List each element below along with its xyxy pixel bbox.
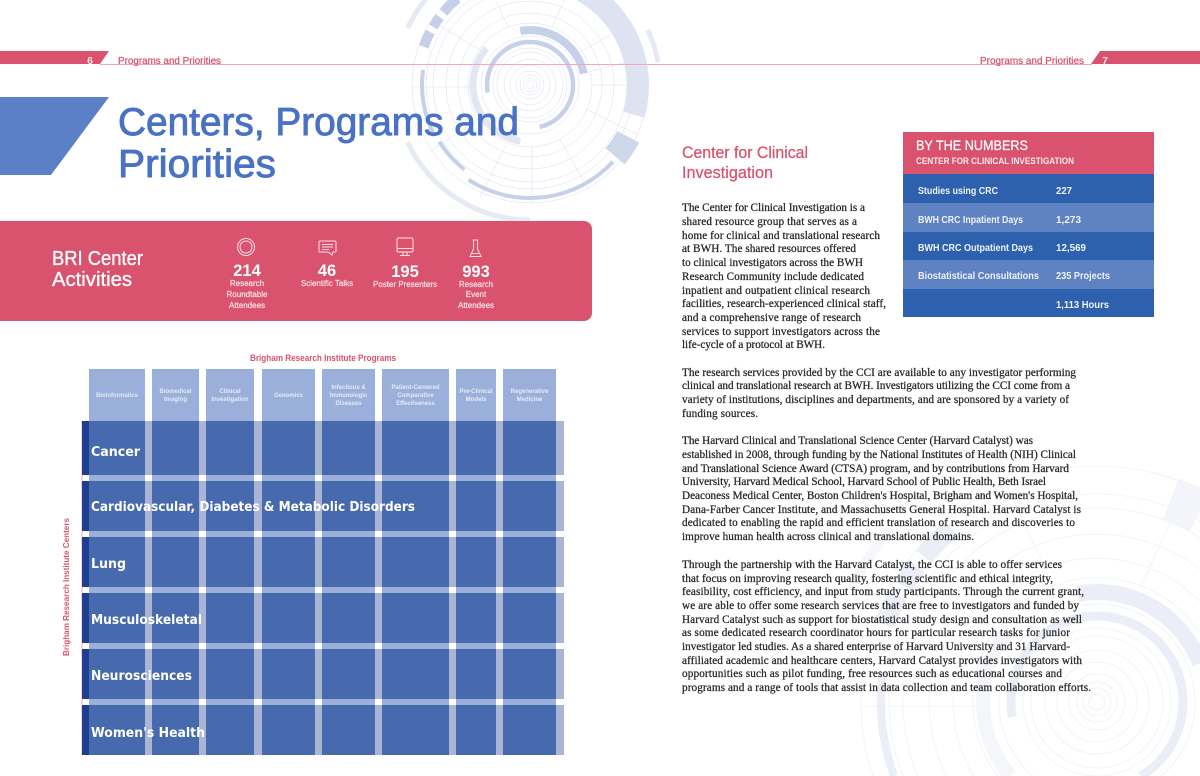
text block: third paragraph: dedicated to enabling the rapid and efficient translation of research and discoveries to	[682, 517, 1075, 529]
program column labels: Pre-Clinical	[459, 389, 493, 395]
program column labels: Diseases	[335, 401, 362, 407]
panel: by the numbers	[903, 132, 1154, 317]
panel heading	[52, 248, 143, 291]
text block: intro paragraph	[682, 202, 886, 351]
table row: outpatient: 12,569	[1056, 243, 1086, 254]
program column labels: Clinical	[219, 389, 241, 395]
text block: intro paragraph: life-cycle of a protocol at BWH.	[682, 339, 825, 351]
decorative dial: top	[406, 0, 660, 221]
stat: poster presenters: Poster Presenters	[373, 280, 437, 289]
stat: event attendees: Attendees	[458, 301, 494, 310]
row: Cancer	[82, 421, 564, 475]
row: Neurosciences	[82, 649, 564, 699]
program column labels: Medicine	[517, 397, 543, 403]
text block: second paragraph: The research services provided by the CCI are available to any investigator performing	[682, 367, 1076, 379]
decorative dial: bottom right	[852, 466, 1200, 776]
table row: studies: 227	[1056, 186, 1072, 197]
chart axis label: centers: Brigham Research Institute Centers	[61, 518, 71, 656]
stat: poster presenters: 195	[391, 263, 419, 281]
text block: second paragraph: funding sources.	[682, 408, 758, 420]
title: Centers, Programs and	[118, 101, 519, 144]
row: Musculoskeletal: Musculoskeletal	[91, 612, 202, 628]
stat: roundtable attendees: Research	[230, 279, 264, 288]
text block: third paragraph: established in 2008, through funding by the National Institutes of Health (NIH) Clinical	[682, 449, 1076, 461]
table row: inpatient: BWH CRC Inpatient Days	[918, 215, 1023, 226]
program column labels: Infectious &	[331, 385, 366, 391]
left running head: Programs and Priorities	[118, 55, 221, 67]
right running head: Programs and Priorities	[980, 55, 1084, 67]
program columns	[89, 369, 556, 755]
text block: fourth paragraph: that focus on improving research quality, fostering scientific and ethical integrity,	[682, 573, 1053, 585]
stat: scientific talks	[301, 241, 353, 288]
text block: third paragraph: and Translational Science Award (CTSA) program, and by contributions from Harvard	[682, 463, 1069, 475]
program column labels: Immunologic	[330, 393, 368, 399]
stat: poster presenters	[373, 238, 437, 289]
stat: roundtable attendees: 214	[233, 262, 262, 280]
chart heading: programs: Brigham Research Institute Programs	[250, 353, 396, 363]
stat: event attendees: Research	[459, 280, 493, 289]
text block: third paragraph: Dana-Farber Cancer Institute, and Massachusetts General Hospital. Harvard Catalyst is	[682, 504, 1081, 516]
panel heading: Activities	[52, 269, 132, 291]
text block: fourth paragraph: opportunities such as pilot funding, free resources such as educational courses and	[682, 668, 1062, 680]
table row: consultations: Biostatistical Consultations	[918, 271, 1039, 282]
row: Women's Health	[82, 705, 564, 755]
program column labels: Biomedical	[159, 389, 192, 395]
text block: intro paragraph: The Center for Clinical Investigation is a	[682, 202, 865, 214]
section heading: Investigation	[682, 163, 773, 182]
text block: fourth paragraph: as some dedicated research coordinator hours for particular research tasks for junior	[682, 627, 1070, 639]
left page tab: 6	[87, 55, 93, 67]
header rule	[100, 64, 1092, 65]
text block: intro paragraph: at BWH. The shared resources offered	[682, 243, 856, 255]
text block: fourth paragraph: affiliated academic and healthcare centers, Harvard Catalyst provides investigators with	[682, 655, 1082, 667]
table header: CENTER FOR CLINICAL INVESTIGATION	[916, 156, 1074, 167]
table row: inpatient	[903, 203, 1154, 232]
row: Lung: Lung	[91, 556, 126, 572]
right page tab	[1091, 51, 1200, 67]
text block: second paragraph: clinical and translational research at BWH. Investigators utilizing the CCI come from a	[682, 380, 1070, 392]
text block: third paragraph: Deaconess Medical Center, Boston Children's Hospital, Brigham and Women's Hospital,	[682, 490, 1078, 502]
table row: consultations: 235 Projects	[1056, 271, 1110, 282]
text block: third paragraph: University, Harvard Medical School, Harvard School of Public Health, Beth Israel	[682, 476, 1046, 488]
text block: intro paragraph: services to support investigators across the	[682, 326, 880, 338]
table row: hours	[903, 289, 1154, 317]
section heading	[682, 143, 808, 182]
panel: BRI center activities	[0, 221, 592, 321]
program column labels: Patient-Centered	[391, 385, 440, 391]
stat: roundtable attendees: Roundtable	[227, 290, 268, 299]
right page tab: 7	[1102, 55, 1108, 67]
program column labels: Comparative	[397, 393, 434, 399]
table header	[903, 132, 1154, 174]
row: Cardiovascular	[82, 481, 564, 531]
text block: fourth paragraph: we are able to offer some research services that are free to investigators and funded by	[682, 600, 1079, 612]
text block: third paragraph: improve human health across clinical and translational domains.	[682, 531, 974, 543]
text block: third paragraph: The Harvard Clinical and Translational Science Center (Harvard Catalyst) was	[682, 435, 1033, 447]
text block: intro paragraph: shared resource group that serves as a	[682, 216, 857, 228]
left page tab	[0, 51, 109, 67]
program column labels: Investigation	[211, 397, 249, 403]
row: Musculoskeletal	[82, 593, 564, 643]
panel heading: BRI Center	[52, 248, 143, 270]
table row: consultations	[903, 260, 1154, 289]
text block: third paragraph	[682, 435, 1081, 543]
row: Cardiovascular: Cardiovascular, Diabetes & Metabolic Disorders	[91, 499, 415, 515]
program column labels: Models	[466, 397, 487, 403]
text block: fourth paragraph	[682, 559, 1091, 694]
text block: intro paragraph: Research Community include dedicated	[682, 271, 864, 283]
table header: BY THE NUMBERS	[916, 137, 1028, 153]
text block: fourth paragraph: programs and a range of tools that assist in data collection and team collaboration efforts.	[682, 682, 1091, 694]
program column labels: Imaging	[164, 397, 187, 403]
program column labels: Bioinformatics	[96, 393, 139, 399]
row: Women's Health: Women's Health	[91, 725, 205, 741]
section heading: Center for Clinical	[682, 143, 808, 162]
title	[118, 101, 519, 186]
row: Lung	[82, 537, 564, 587]
left edge rule	[82, 421, 83, 755]
title accent shape	[0, 97, 109, 175]
text block: intro paragraph: to clinical investigators across the BWH	[682, 257, 863, 269]
text block: intro paragraph: and a comprehensive range of research	[682, 312, 861, 324]
stat: scientific talks: 46	[318, 262, 336, 280]
text block: intro paragraph: inpatient and outpatient clinical research	[682, 285, 870, 297]
table row: outpatient	[903, 232, 1154, 260]
text block: intro paragraph: home for clinical and translational research	[682, 230, 880, 242]
program column labels: Regenerative	[511, 389, 549, 395]
text block: second paragraph	[682, 367, 1076, 420]
table row: outpatient: BWH CRC Outpatient Days	[918, 243, 1033, 254]
table row: studies	[903, 174, 1154, 203]
text block: second paragraph: variety of institutions, disciplines and departments, and are sponsored by a variety of	[682, 394, 1069, 406]
stat: roundtable attendees	[227, 238, 268, 310]
stat: event attendees: Event	[466, 290, 487, 299]
text block: fourth paragraph: investigator led studies. As a shared enterprise of Harvard University and 31 Harvard-	[682, 641, 1070, 653]
program column labels: Genomics	[274, 393, 304, 399]
table row: hours: 1,113 Hours	[1056, 300, 1109, 311]
table row: inpatient: 1,273	[1056, 215, 1081, 226]
text block: fourth paragraph: Harvard Catalyst such as support for biostatistical study design and consultation as well	[682, 614, 1082, 626]
matrix chart	[82, 369, 564, 755]
table row: studies: Studies using CRC	[918, 186, 998, 197]
text block: fourth paragraph: Through the partnership with the Harvard Catalyst, the CCI is able to offer services	[682, 559, 1062, 571]
text block: fourth paragraph: feasibility, cost efficiency, and input from study participants. Through the current grant,	[682, 586, 1084, 598]
program column labels	[96, 385, 549, 407]
stat: scientific talks: Scientific Talks	[301, 279, 353, 288]
row: Neurosciences: Neurosciences	[91, 668, 192, 684]
program column labels: Effectiveness	[396, 401, 436, 407]
stat: event attendees	[458, 240, 494, 310]
stat: event attendees: 993	[462, 263, 490, 281]
title: Priorities	[118, 143, 276, 186]
text block: intro paragraph: facilities, research-experienced clinical staff,	[682, 298, 886, 310]
row: Cancer: Cancer	[91, 444, 140, 460]
stat: roundtable attendees: Attendees	[229, 301, 265, 310]
